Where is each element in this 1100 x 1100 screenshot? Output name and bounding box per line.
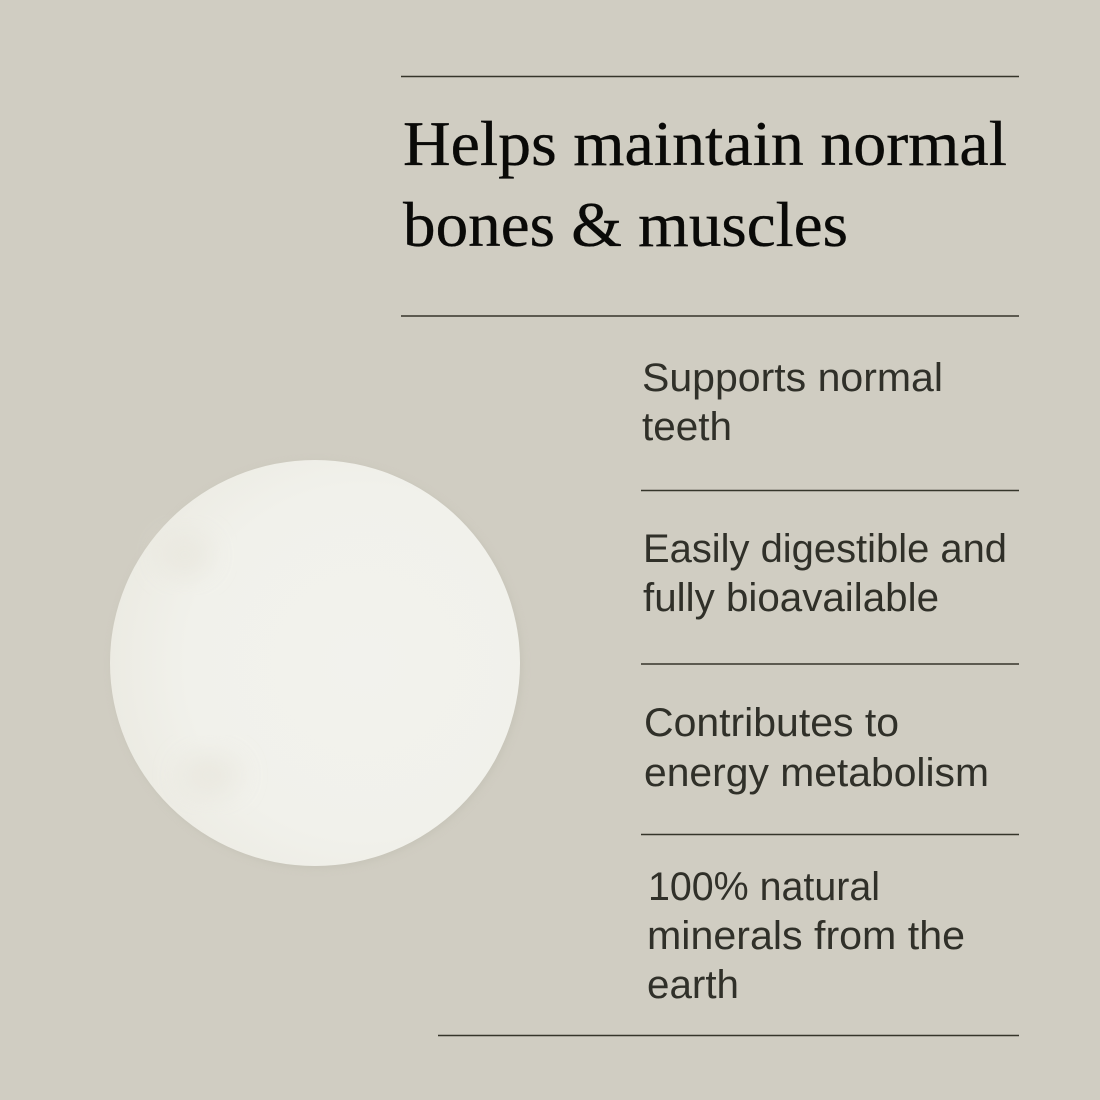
heading <box>403 108 1007 260</box>
heading: Helps maintain normal <box>403 108 1007 179</box>
benefit: digestibility: fully bioavailable <box>643 576 939 620</box>
benefit: natural minerals: 100% natural <box>648 865 880 909</box>
benefit: digestibility: Easily digestible and <box>643 527 1007 571</box>
benefit: energy metabolism: energy metabolism <box>644 751 989 795</box>
benefit: digestibility <box>643 527 1007 620</box>
heading: bones & muscles <box>403 189 848 260</box>
benefit: teeth: teeth <box>642 405 732 449</box>
benefit: natural minerals: earth <box>647 963 739 1007</box>
benefit: natural minerals <box>647 865 965 1007</box>
powder disc <box>110 460 522 868</box>
benefit: natural minerals: minerals from the <box>647 914 965 958</box>
benefit: teeth: Supports normal <box>642 356 943 400</box>
benefit: energy metabolism: Contributes to <box>644 701 899 745</box>
benefit: teeth <box>642 356 943 449</box>
benefit: energy metabolism <box>644 701 989 795</box>
